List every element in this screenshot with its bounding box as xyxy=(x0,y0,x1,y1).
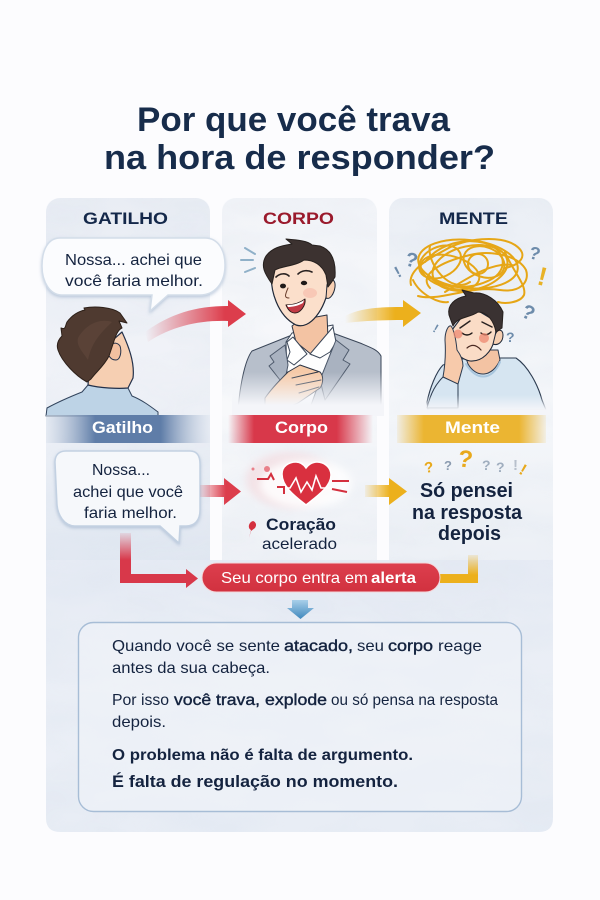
panel: explanation: Quando você se sente xyxy=(112,638,280,655)
panel: explanation: reage xyxy=(438,638,482,655)
title: Por que você trava xyxy=(137,101,451,139)
panel: explanation: explode xyxy=(265,692,327,709)
title xyxy=(104,101,495,177)
heading: mente: MENTE xyxy=(439,209,508,228)
speech bubble: bottom: Nossa... xyxy=(92,462,150,479)
label: mente: Mente xyxy=(445,418,500,437)
pill: body on alert xyxy=(202,563,440,592)
pill: body on alert: alerta xyxy=(371,570,416,587)
label: corpo: Corpo xyxy=(275,418,328,437)
question marks around the head: ! xyxy=(535,261,550,292)
panel: explanation: corpo xyxy=(388,638,433,655)
speech bubble: bottom xyxy=(55,451,200,543)
illustration: man with hand on chest xyxy=(238,239,381,410)
illustration: worried man xyxy=(427,290,546,410)
pill: body on alert: Seu corpo entra em xyxy=(221,570,368,587)
small question marks: ! xyxy=(513,457,518,474)
heading: corpo: CORPO xyxy=(263,209,334,228)
panel: explanation xyxy=(78,622,522,812)
panel: explanation: antes da sua cabeça. xyxy=(112,660,270,677)
small question marks xyxy=(423,445,529,479)
panel: explanation: seu xyxy=(357,638,384,655)
panel: background columns xyxy=(46,198,553,832)
text: thought result: Só pensei xyxy=(420,480,513,502)
text: heart caption: Coração xyxy=(266,515,336,534)
small question marks: ? xyxy=(444,458,452,473)
speech bubble: bottom: achei que você xyxy=(73,484,183,501)
illustration: scribbled thoughts xyxy=(411,235,527,303)
label: corpo xyxy=(228,415,373,443)
panel: explanation: O problema não é falta de argumento. xyxy=(112,747,413,764)
icon: racing heart xyxy=(246,452,352,508)
small question marks: ? xyxy=(496,459,505,475)
icon: red drop xyxy=(249,521,256,538)
panel: explanation: ou só pensa na resposta xyxy=(331,692,498,709)
heading: gatilho: GATILHO xyxy=(83,209,168,228)
speech bubble: top xyxy=(42,238,225,311)
text: thought result: na resposta xyxy=(412,502,523,524)
label: gatilho: Gatilho xyxy=(92,418,153,437)
connector: bubble to pill xyxy=(120,533,198,588)
small question marks: ? xyxy=(456,445,474,474)
mist under the worried man xyxy=(400,395,550,415)
label: gatilho xyxy=(46,415,210,443)
arrow: corpo to mente xyxy=(345,300,421,327)
arrow: bubble to heart xyxy=(200,478,241,505)
motion marks xyxy=(241,248,255,272)
small question marks: ? xyxy=(423,459,435,477)
speech bubble: bottom: faria melhor. xyxy=(84,505,177,522)
connector: thought to pill xyxy=(440,555,478,583)
text: thought result xyxy=(412,480,523,545)
text: heart caption xyxy=(262,515,337,553)
text: heart caption: acelerado xyxy=(262,536,337,553)
mist under the man xyxy=(232,372,384,416)
question marks around the head: ? xyxy=(518,301,538,326)
text: thought result: depois xyxy=(438,523,501,545)
question marks around the head xyxy=(392,242,550,345)
title: na hora de responder? xyxy=(104,139,495,177)
question marks around the head: ? xyxy=(527,242,543,265)
label: mente xyxy=(397,415,546,443)
question marks around the head: ? xyxy=(403,249,420,273)
question marks around the head: ? xyxy=(506,329,515,345)
panel: explanation: você trava, xyxy=(174,692,260,709)
panel: explanation: atacado, xyxy=(284,638,353,655)
speech bubble: top: Nossa... achei que xyxy=(65,252,202,269)
question marks around the head: ! xyxy=(430,321,441,336)
question marks around the head: ! xyxy=(392,264,405,282)
speech bubble: top: você faria melhor. xyxy=(65,273,203,290)
arrow: down to explanation xyxy=(287,600,314,619)
panel: explanation: Por isso xyxy=(112,692,169,709)
arrow: heart to thought xyxy=(365,478,407,505)
small question marks: ? xyxy=(482,457,491,473)
small question marks: ! xyxy=(516,462,529,479)
panel: explanation: depois. xyxy=(112,714,166,731)
illustration: person seen from behind xyxy=(46,307,158,416)
arrow: gatilho to corpo xyxy=(145,300,246,342)
panel: explanation: É falta de regulação no momento. xyxy=(112,772,398,791)
